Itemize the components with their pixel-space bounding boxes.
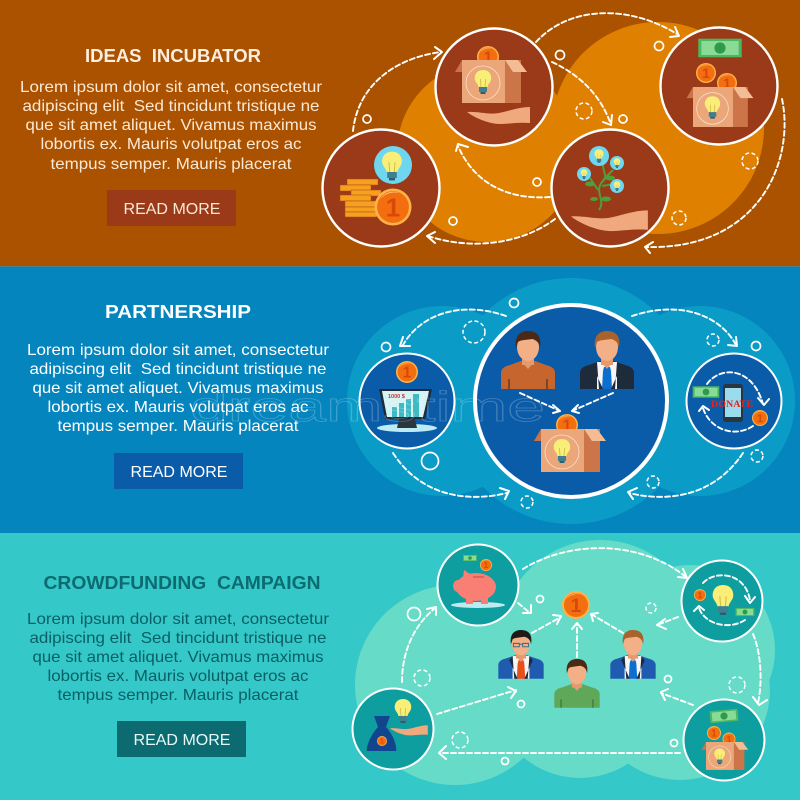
panel: ideas incubator xyxy=(0,0,800,266)
panel: partnership xyxy=(0,266,800,533)
body text xyxy=(20,79,323,173)
arrows into box xyxy=(520,393,613,413)
icon: piggy bank: 1 xyxy=(484,560,489,570)
light green cloud blob xyxy=(355,540,775,785)
icon: monitor with chart: 1 xyxy=(403,365,412,382)
icon: money bag and bulb on hand xyxy=(352,688,434,770)
body text xyxy=(27,611,330,704)
heading: partnership: PARTNERSHIP xyxy=(105,302,251,322)
icon: box with coin on hand: 1 xyxy=(484,50,493,67)
icon: box with money and coins xyxy=(660,28,778,144)
button: read more: READ MORE xyxy=(130,464,228,481)
icon: monitor with chart xyxy=(360,354,454,448)
button: read more: READ MORE xyxy=(134,732,230,749)
body text: lobortis ex. Mauris volutpat eros ac xyxy=(48,668,308,685)
body text: Lorem ipsum dolor sit amet, consectetur xyxy=(27,611,330,628)
icon: plant with bulbs on hand xyxy=(552,130,668,246)
icon: box with coin on hand xyxy=(436,28,552,146)
icon: central coin xyxy=(562,591,590,619)
small rings xyxy=(363,42,758,225)
button: read more xyxy=(107,190,236,226)
body text: Lorem ipsum dolor sit amet, consectetur xyxy=(20,79,323,96)
icon: money bag and bulb on hand: 1 xyxy=(380,738,384,746)
icon: coins and light bulb xyxy=(322,130,440,246)
arrows: crowdfunding flow xyxy=(402,548,767,759)
button: read more xyxy=(117,721,246,757)
body text: adipiscing elit Sed tincidunt tristique ne xyxy=(30,361,327,378)
watermark: dreamstime xyxy=(190,383,545,430)
body text: tempus semper. Mauris placerat xyxy=(50,156,292,173)
body text: lobortis ex. Mauris volutpat eros ac xyxy=(40,136,302,153)
body text: tempus semper. Mauris placerat xyxy=(58,418,299,435)
icon: box with money and coins: 1 xyxy=(702,65,710,81)
light blue background blob xyxy=(347,278,795,524)
orange background blob xyxy=(397,22,764,242)
body text xyxy=(27,342,330,435)
icon: piggy bank xyxy=(438,544,518,626)
icon: coins and light bulb: 1 xyxy=(386,194,400,222)
body text: tempus semper. Mauris placerat xyxy=(58,687,299,704)
icon: phone donate cycle: DONATE xyxy=(711,399,753,409)
person: man in green sweater xyxy=(554,659,600,708)
body text: adipiscing elit Sed tincidunt tristique ne xyxy=(30,630,327,647)
arrows: ideas cycle xyxy=(353,13,785,253)
icon: box with money and coins: 1 xyxy=(723,75,731,91)
heading: ideas incubator: IDEAS INCUBATOR xyxy=(85,46,261,66)
body text: que sit amet aliquet. Vivamus maximus xyxy=(32,380,324,397)
icon: central coin: 1 xyxy=(571,595,582,617)
icon: two partners funding box: 1 xyxy=(563,418,572,435)
icon: phone donate cycle: 1 xyxy=(757,413,763,425)
icon: box with money and coins: 1 xyxy=(726,734,732,744)
icon: two partners funding box xyxy=(475,305,667,497)
icon: bulb cycle with coin and money: 1 xyxy=(698,590,703,600)
body text: Lorem ipsum dolor sit amet, consectetur xyxy=(27,342,330,359)
icon: phone donate cycle xyxy=(686,354,782,448)
person: man in suit with blue tie xyxy=(580,331,634,389)
person: man in orange sweater xyxy=(501,331,555,389)
body text: que sit amet aliquet. Vivamus maximus xyxy=(32,649,324,666)
heading: crowdfunding campaign: CROWDFUNDING CAMPAIGN xyxy=(44,573,320,593)
icon: monitor with chart: 1000 $ xyxy=(388,394,405,400)
person: man with blue tie xyxy=(610,630,656,679)
small rings xyxy=(408,596,745,764)
body text: lobortis ex. Mauris volutpat eros ac xyxy=(48,399,308,416)
small rings xyxy=(382,298,763,508)
body text: que sit amet aliquet. Vivamus maximus xyxy=(26,117,316,134)
button: read more xyxy=(114,453,243,489)
person: man with glasses and red tie xyxy=(498,630,544,679)
arrows: partnership cycle xyxy=(393,309,743,499)
icon: box with money and coins xyxy=(684,700,764,780)
icon: bulb cycle with coin and money xyxy=(682,560,762,642)
button: read more: READ MORE xyxy=(124,201,220,218)
icon: box with money and coins: 1 xyxy=(711,728,717,739)
body text: adipiscing elit Sed tincidunt tristique ne xyxy=(22,98,320,115)
panel: crowdfunding campaign xyxy=(0,533,800,800)
